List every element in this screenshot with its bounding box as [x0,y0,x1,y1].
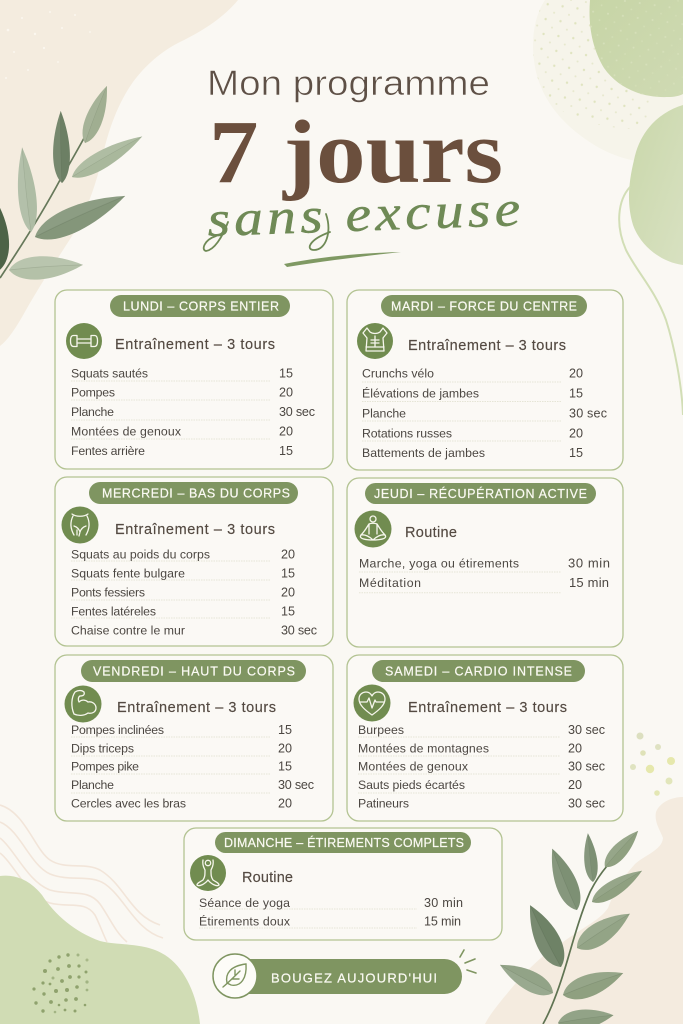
day pill: samedi [372,660,585,682]
exercise list: Planche [71,405,114,419]
activity list: Marche, yoga ou étirements [359,556,519,570]
exercise list: Crunchs vélo [362,367,434,381]
exercise list [71,548,317,637]
heading: Entraînement – 3 tours [117,700,276,716]
exercise list: 20 [568,741,582,755]
decorative wave lines [0,805,163,942]
exercise list: Planche [71,778,114,792]
activity list: 15 min [424,915,461,929]
day pill: lundi: LUNDI – CORPS ENTIER [123,300,279,314]
exercise list: Fentes latéreles [71,605,156,619]
icon: dumbbell [66,323,102,359]
title line: 7 jours: 7 jours [209,103,503,202]
exercise list: 15 [278,723,292,737]
exercise list: 20 [568,778,582,792]
exercise list: 20 [281,586,295,600]
bottom-left dots cluster [32,953,89,1013]
exercise list: Montées de genoux [358,760,469,774]
exercise list: Pompes inclinées [71,723,164,737]
exercise list: 15 [281,605,295,619]
panel: samedi [347,655,623,821]
day pill: mardi [381,295,587,317]
title line: Mon programme: Mon programme [207,64,490,103]
day pill: jeudi [365,483,596,504]
day pill: samedi: SAMEDI – CARDIO INTENSE [385,664,572,678]
panel: dimanche [184,828,502,940]
activity list: Méditation [359,576,421,590]
exercise list [71,366,315,458]
exercise list: 20 [278,796,292,810]
panel: mercredi [55,477,333,646]
panel: vendredi [55,655,333,821]
call to action button [213,950,476,998]
icon: meditation [354,510,392,548]
icon: leaf badge [213,954,257,998]
exercise list: Squats au poids du corps [71,548,210,562]
day pill: mercredi: MERCREDI – BAS DU CORPS [102,486,290,500]
exercise list: Burpees [358,723,404,737]
icon: flexed arm [64,686,102,722]
panel: lundi [55,290,333,469]
exercise list [358,723,605,810]
exercise list: 20 [569,367,583,381]
right green blob [629,105,683,265]
panel: jeudi [347,478,623,647]
day pill: lundi [110,295,290,317]
exercise list: Patineurs [358,796,409,810]
exercise list: 30 sec [568,796,605,810]
exercise list: Pompes pike [71,760,139,774]
exercise list: Dips triceps [71,741,134,755]
exercise list [362,367,607,460]
script flourishes [204,214,330,251]
exercise list: Cercles avec les bras [71,796,186,810]
exercise list: 20 [279,425,293,439]
exercise list: 15 [279,444,293,458]
exercise list: Squats fente bulgare [71,567,185,581]
activity list [359,555,610,593]
icon: stretching [190,855,226,891]
right leaf sprig [495,826,646,1024]
exercise list: Élévations de jambes [362,386,479,401]
heading: Routine [405,525,457,541]
exercise list: Sauts pieds écartés [358,778,465,792]
exercise list: 20 [281,548,295,562]
exercise list: Squats sautés [71,366,148,380]
top-right green blob [590,0,683,97]
panel: mardi [347,290,623,470]
right confetti dots [630,732,675,796]
activity list: 15 min [569,575,609,590]
exercise list: Fentes arrière [71,444,145,458]
day pill: vendredi: VENDREDI – HAUT DU CORPS [93,664,295,678]
title [204,64,521,267]
day pill: jeudi: JEUDI – RÉCUPÉRATION ACTIVE [374,486,587,501]
exercise list: Montées de montagnes [358,741,489,755]
exercise list: Pompes [71,386,115,400]
exercise list: Rotations russes [362,426,452,440]
exercise list: 30 sec [568,723,605,737]
right curved line [619,187,683,415]
icon: torso [357,323,393,359]
day pill: mardi: MARDI – FORCE DU CENTRE [391,300,577,314]
sparkle marks [460,950,476,973]
exercise list: Ponts fessiers [71,586,145,600]
day pill: dimanche [215,832,471,853]
exercise list: 30 sec [278,778,314,792]
exercise list: 20 [279,386,293,400]
activity list: 30 min [424,896,463,910]
heading: Entraînement – 3 tours [408,338,566,354]
heading: Entraînement – 3 tours [115,522,275,538]
exercise list: 30 sec [568,760,605,774]
exercise list: 20 [569,426,583,440]
heading: Entraînement – 3 tours [408,700,567,716]
activity list: 30 min [568,555,610,570]
exercise list: 15 [279,366,293,380]
heading: Routine [242,870,293,886]
left leaf sprig [0,83,147,282]
exercise list: Planche [362,406,406,420]
exercise list: Chaise contre le mur [71,623,185,637]
bottom-left green blob [0,876,200,1024]
title line: sans excuse: sans excuse [206,181,521,247]
icon: hips [62,506,98,544]
exercise list: 30 sec [279,405,315,419]
exercise list: Battements de jambes [362,446,485,460]
heading: Entraînement – 3 tours [115,337,275,353]
day pill: mercredi [89,482,298,504]
bottom-right beige blob [485,797,683,1024]
top-right pale dotted blob [533,0,683,165]
button text: BOUGEZ AUJOURD'HUI [271,970,437,986]
top-left beige blob [0,0,238,346]
activity list: Séance de yoga [199,896,290,910]
exercise list: 15 [281,567,295,581]
exercise list: Montées de genoux [71,425,182,439]
activity list [199,896,463,929]
day pill: vendredi [81,660,306,682]
brush underline [284,252,401,267]
exercise list: 30 sec [281,623,317,637]
exercise list: 15 [569,387,583,401]
exercise list: 30 sec [569,406,607,420]
exercise list: 20 [278,741,292,755]
exercise list: 15 [278,760,292,774]
exercise list [71,723,314,810]
activity list: Étirements doux [199,914,291,929]
day pill: dimanche: DIMANCHE – ÉTIREMENTS COMPLETS [224,835,464,850]
icon: heart pulse [354,684,390,722]
exercise list: 15 [569,446,583,460]
